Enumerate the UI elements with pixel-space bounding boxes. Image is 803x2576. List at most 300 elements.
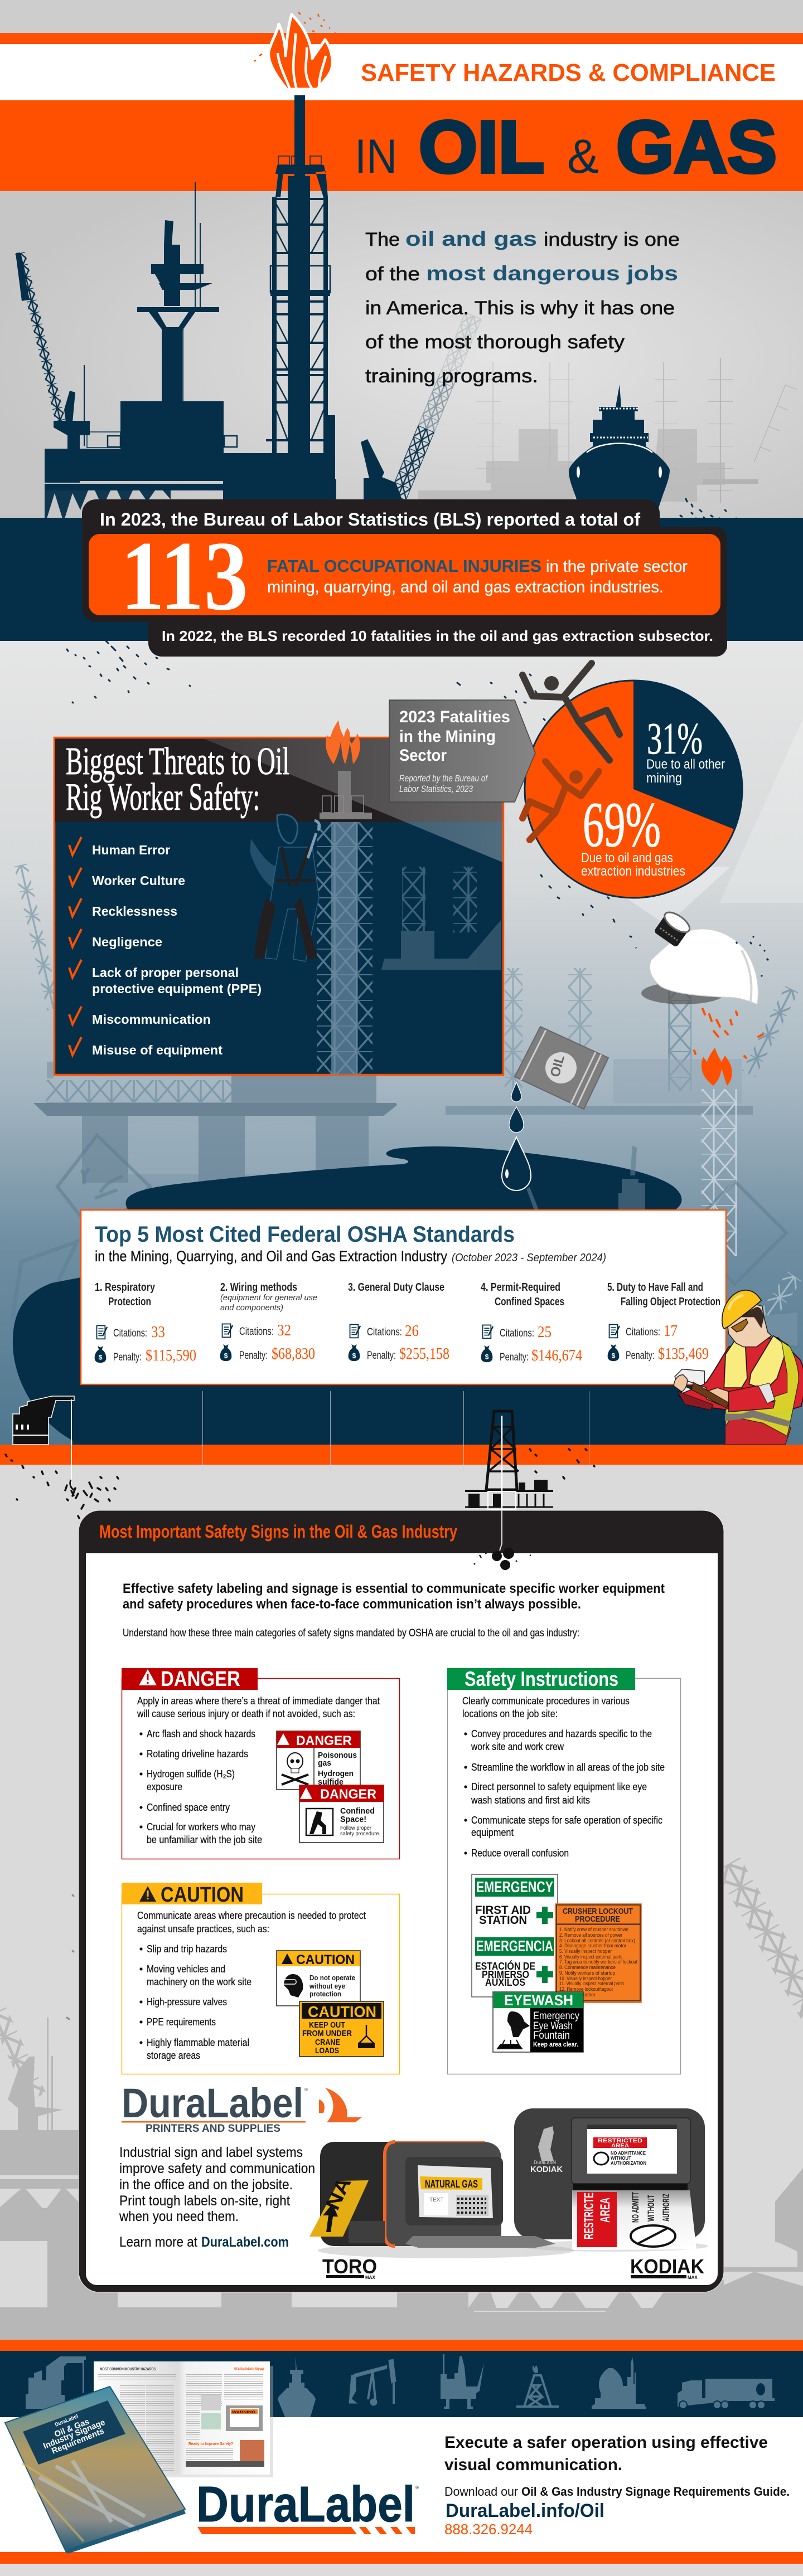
sign: eyewash: Eye Wash [533, 2020, 573, 2032]
text: printer pitch: Industrial sign and label systems [119, 2145, 303, 2160]
sign: caution crane loads [299, 2001, 384, 2057]
sign: crusher lockout procedure: 11. Visually inspect external parts [559, 1981, 624, 1986]
sign: caution crane loads: KEEP OUT [309, 2020, 345, 2030]
checklist: Lack of proper personal [92, 965, 239, 980]
title: OIL [419, 106, 544, 188]
caution bullets: machinery on the work site [147, 1976, 251, 1987]
column 4: $146,674 [531, 1347, 582, 1364]
column 3: Citations: [367, 1326, 402, 1338]
logo: DuraLabel printers and supplies: DuraLabel [122, 2080, 303, 2126]
splatter: navy ink [67, 499, 737, 937]
column 2: Penalty: [239, 1350, 268, 1362]
sign: danger confined space: safety procedure. [340, 1831, 380, 1837]
sign: danger confined space: Follow proper [340, 1825, 372, 1831]
illustration: Kodiak printer: RESTRICTED [598, 2138, 642, 2144]
black stat box: In 2023, the Bureau of Labor Statistics (BLS) reported a total of [100, 509, 640, 529]
danger bullets: Hydrogen sulfide (H₂S) [147, 1768, 235, 1780]
panel: safety instructions: Clearly communicate procedures in various [462, 1695, 630, 1707]
column 5: 5. Duty to Have Fall and [607, 1281, 703, 1294]
black stat box: in the private sector [546, 557, 688, 576]
logo: KODIAK MAX: MAX [688, 2275, 698, 2280]
icon: refinery [592, 2357, 646, 2409]
danger bullets: exposure [147, 1781, 182, 1792]
right white tower [702, 1089, 737, 1256]
sign: emergency first aid: EMERGENCIA [476, 1937, 553, 1955]
illustration: Toro printer: NATURAL GAS [425, 2179, 478, 2190]
panel: safety instructions: Safety Instructions [465, 1668, 618, 1690]
icon: falling worker dark [523, 663, 620, 760]
misty background rigs [418, 358, 796, 503]
text: printer pitch [119, 2145, 315, 2250]
sign: caution crane loads: CRANE [315, 2038, 340, 2047]
column 2: $68,830 [272, 1345, 315, 1363]
column 1: Penalty: [113, 1352, 142, 1363]
big number: 113 [120, 521, 248, 631]
sign: crusher lockout procedure: 5. Visually inspect hopper [559, 1948, 612, 1954]
icon: flame [254, 12, 336, 89]
light beam from headlamp [580, 867, 731, 925]
column 2: 2. Wiring methods [220, 1281, 297, 1294]
black stat box: FATAL OCCUPATIONAL INJURIES [267, 556, 541, 576]
sign: danger poisonous gas [277, 1731, 360, 1790]
background rig left, grey [0, 2007, 79, 2340]
ship silhouette [569, 385, 670, 510]
pie chart: 2023 fatalities: mining [646, 771, 682, 786]
danger bullets: be unfamiliar with the job site [147, 1834, 262, 1845]
sign: emergency first aid: FIRST AID [475, 1904, 531, 1917]
illustration: Kodiak printer: RESTRICTE [582, 2193, 597, 2239]
text: printer pitch: Print tough labels on-site, right [119, 2193, 290, 2209]
illustration: Kodiak printer: AUTHORIZATION [611, 2161, 646, 2166]
sign: eyewash: Fountain [533, 2030, 570, 2042]
black stat box [82, 499, 727, 657]
splatter: grey ink [67, 1861, 665, 2092]
footer icon band [0, 2351, 803, 2418]
background crane right of standards [742, 1271, 801, 1346]
callout: 2023 fatalities in the mining sector: in the Mining [399, 727, 496, 746]
checklist: Recklessness [92, 904, 177, 918]
bottom orange stripe [0, 2552, 803, 2564]
background rig right, grey [715, 1857, 803, 2340]
header band: orange [0, 100, 803, 191]
callout: 2023 fatalities in the mining sector: 2023 Fatalities [399, 708, 510, 726]
column 1: Protection [108, 1296, 151, 1308]
panel header [55, 739, 502, 822]
instruction bullets: Direct personnel to safety equipment like eye [471, 1781, 647, 1792]
call to action: Oil & Gas Industry Signage Requirements Guide. [521, 2485, 790, 2499]
column 5: 17 [664, 1323, 678, 1340]
column 1: 1. Respiratory [95, 1281, 156, 1294]
intro text block: in America. This is why it has one [365, 298, 675, 319]
callout: 2023 fatalities in the mining sector [389, 700, 535, 802]
header band: thin orange stripe [0, 33, 803, 44]
tower in panel [317, 771, 373, 1075]
title [355, 59, 777, 188]
sign: emergency first aid: AUXILOS [485, 1977, 525, 1988]
sign: danger poisonous gas: Hydrogen [318, 1769, 354, 1778]
open pages: Oil & Gas Industry Signage [234, 2368, 264, 2371]
icon: pumpjack [349, 2359, 396, 2405]
caution bullets: Slip and trip hazards [147, 1943, 227, 1955]
sign: crusher lockout procedure: 2. Remove all sources of power [559, 1932, 622, 1938]
danger bullets: Arc flash and shock hazards [147, 1728, 255, 1739]
sign: eyewash: Keep area clear. [533, 2040, 578, 2048]
sign: caution crane loads: CAUTION [308, 2003, 376, 2020]
intro text block: most dangerous jobs [426, 262, 678, 285]
oil pool [13, 1146, 725, 1445]
panel: OSHA standards: in the Mining, Quarrying, and Oil and Gas Extraction Industry [95, 1248, 447, 1265]
illustration: Kodiak printer: KODIAK [530, 2165, 563, 2174]
column 3: $255,158 [399, 1345, 449, 1363]
sign: crusher lockout procedure: PROCEDURE [575, 1914, 620, 1924]
callout: 2023 fatalities in the mining sector: Sector [399, 746, 447, 765]
sign: danger poisonous gas: sulfide [318, 1777, 344, 1787]
column 4: 4. Permit-Required [481, 1281, 560, 1294]
sign: caution eye protection [277, 1951, 360, 2006]
title: SAFETY HAZARDS & COMPLIANCE [361, 59, 776, 86]
sign: caution eye protection: without eye [309, 1982, 345, 1990]
caution bullets: Moving vehicles and [147, 1963, 225, 1975]
column 5: $135,469 [658, 1345, 709, 1363]
sign: emergency first aid: STATION [479, 1914, 527, 1927]
text: printer pitch: Learn more at [119, 2234, 197, 2250]
checklist [69, 837, 262, 1057]
main rig silhouette [45, 182, 336, 518]
panel: OSHA standards [81, 1210, 726, 1384]
danger bullets [139, 1728, 262, 1845]
panel: OSHA standards: (October 2023 - September 2024) [452, 1252, 606, 1264]
sign: crusher lockout procedure: CRUSHER LOCKOUT [563, 1907, 633, 1916]
intro text block [365, 227, 680, 387]
callout: 2023 fatalities in the mining sector: Labor Statistics, 2023 [399, 784, 473, 794]
column 5: Penalty: [626, 1350, 655, 1362]
icon: hard hat with headlamp [636, 908, 768, 1004]
navy band [0, 518, 803, 641]
light windows below signs panel [118, 2292, 664, 2312]
column 1: $115,590 [146, 1347, 196, 1364]
column 2: (equipment for general use [220, 1293, 317, 1302]
icon: ship [278, 2356, 316, 2418]
column 4: Penalty: [500, 1352, 529, 1363]
panel: OSHA standards: Top 5 Most Cited Federal OSHA Standards [95, 1222, 515, 1247]
panel: safety instructions: locations on the job site: [462, 1708, 558, 1719]
pie chart: 2023 fatalities: Due to oil and gas [581, 850, 673, 866]
sign: crusher lockout procedure: 6. Visually inspect external parts [559, 1954, 622, 1960]
column 4: Citations: [500, 1328, 534, 1339]
illustration: Kodiak printer: DuraLabel [534, 2160, 556, 2165]
icon: oil drops [502, 1082, 531, 1190]
intro paragraph: and safety procedures when face-to-face communication isn’t always possible. [123, 1597, 581, 1612]
panel: caution: Communicate areas where precaution is needed to protect [137, 1910, 366, 1921]
illustration: Kodiak printer [514, 2108, 708, 2252]
call to action: 888.326.9244 [444, 2521, 533, 2538]
left crane silhouette [15, 252, 120, 449]
intro text block: of the most thorough safety [365, 332, 625, 353]
checklist: Misuse of equipment [92, 1043, 222, 1057]
light diagonal streak [719, 719, 803, 903]
illustration: Kodiak printer: NO ADMITTANCE [611, 2151, 646, 2156]
logo: DuraLabel printers and supplies: ® [304, 2087, 308, 2092]
icon: falling worker on pie [523, 761, 599, 840]
call to action: Execute a safer operation using effective [444, 2433, 768, 2452]
text: printer pitch: in the office and on the jobsite. [119, 2177, 293, 2193]
intro paragraph: Effective safety labeling and signage is essential to communicate specific worker equipment [123, 1581, 665, 1596]
illustration: worker reading clipboard [674, 1290, 803, 1445]
sign: eyewash: Emergency [533, 2010, 579, 2022]
brochure cover: DuraLabel [54, 2413, 79, 2428]
black stat box: mining, quarrying, and oil and gas extraction industries. [267, 578, 664, 596]
panel title [66, 740, 289, 819]
brochure cover [5, 2387, 186, 2554]
sign: emergency first aid: ESTACIÓN DE [475, 1960, 535, 1972]
background rigs, right [446, 968, 799, 1115]
logo: KODIAK MAX: KODIAK [630, 2255, 704, 2278]
logo: TORO MAX: MAX [365, 2275, 375, 2280]
sign: danger poisonous gas: Poisonous [318, 1751, 357, 1760]
caution bullets: PPE requirements [147, 2016, 216, 2028]
icon: flame on tower [326, 720, 360, 764]
intro paragraph: Understand how these three main categories of safety signs mandated by OSHA are crucial to the oil and gas industry: [123, 1627, 579, 1639]
sign: crusher lockout procedure: 4. Disengage crusher from motor [559, 1943, 626, 1948]
section background: safety signs [0, 1465, 803, 2340]
illustration: Toro printer [309, 2142, 574, 2258]
panel heading: Most Important Safety Signs in the Oil & Gas Industry [99, 1522, 457, 1542]
column 5 [607, 1281, 720, 1363]
icon: oil derrick [465, 1411, 553, 1538]
illustration: Kodiak printer: WITHOUT [646, 2195, 656, 2222]
pie chart: 2023 fatalities: extraction industries [581, 864, 685, 879]
top grey background strip [0, 0, 803, 33]
panel: danger: DANGER [161, 1668, 240, 1691]
intro text block: oil and gas [405, 227, 537, 250]
column 3 [348, 1281, 449, 1363]
checklist: Miscommunication [92, 1012, 211, 1027]
icon: oil barrel: OIL [548, 1053, 568, 1079]
open pages: WARNING [232, 2411, 255, 2414]
intro text block: industry is one [544, 229, 680, 250]
caution bullets: storage areas [147, 2050, 200, 2061]
bottom grey strip [0, 2564, 803, 2576]
sign: caution crane loads: FROM UNDER [302, 2029, 352, 2038]
background band below signs [79, 2279, 724, 2340]
call to action: Download our [444, 2485, 518, 2499]
instruction bullets: wash stations and first aid kits [471, 1795, 590, 1806]
column 2: 32 [277, 1322, 291, 1339]
second crane with fading boom [361, 312, 482, 502]
title: GAS [616, 106, 777, 188]
lower dark band under standards [72, 1384, 725, 1445]
call to action [444, 2433, 790, 2538]
sign: crusher lockout procedure: 9. Notify workers of startup [559, 1970, 615, 1976]
caution bullets [139, 1943, 251, 2061]
background crane, left of threats panel [14, 863, 60, 1078]
column 2 [220, 1281, 317, 1363]
section background: skyline [0, 189, 803, 524]
sign: caution eye protection: Do not operate [309, 1974, 355, 1982]
column 3: 26 [405, 1323, 419, 1340]
callout: 2023 fatalities in the mining sector: Reported by the Bureau of [399, 773, 488, 784]
logo: DuraLabel printers and supplies: PRINTERS AND SUPPLIES [146, 2123, 280, 2135]
logo: TORO MAX: TORO [322, 2255, 377, 2278]
column 2: and components) [220, 1303, 283, 1313]
sign: eyewash: EYEWASH [504, 1992, 573, 2009]
panel: safety signs [0, 1510, 803, 2576]
checklist: Negligence [92, 935, 162, 949]
intro paragraph [123, 1581, 665, 1639]
hazard diamonds, background [13, 1135, 786, 1318]
intro text block: The [365, 229, 400, 250]
checklist: protective equipment (PPE) [92, 981, 262, 996]
thin guide lines [203, 1391, 589, 1471]
sign: caution eye protection: CAUTION [296, 1952, 355, 1967]
illustration: brochure [5, 2361, 273, 2554]
pie chart: 2023 fatalities: 31% [647, 715, 703, 764]
intro text block: training programs. [365, 366, 538, 387]
column 1: 33 [151, 1324, 165, 1341]
icon: crane small [13, 1396, 74, 1490]
icon: crane [26, 2356, 86, 2409]
danger bullets: Rotating driveline hazards [147, 1748, 248, 1760]
sign: crusher lockout procedure: 12. Remove lockout/tagout [559, 1986, 613, 1992]
caution bullets: Highly flammable material [147, 2037, 249, 2048]
sign: eyewash [493, 1992, 583, 2052]
icon: derrick [516, 2375, 559, 2407]
sign: crusher lockout procedure: 8. Commence maintenance [559, 1965, 616, 1970]
orange stripe [0, 1445, 803, 1465]
column 3: 3. General Duty Clause [348, 1281, 444, 1294]
sign: crusher lockout procedure: 3. Lockout all controls (at control box) [559, 1938, 635, 1943]
instruction bullets: Convey procedures and hazards specific to the [471, 1728, 652, 1739]
panel: caution [122, 1883, 399, 2074]
panel: danger: Apply in areas where there’s a threat of immediate danger that [137, 1695, 380, 1707]
text: printer pitch: DuraLabel.com [201, 2234, 289, 2250]
icon: small flame and embers [694, 1009, 763, 1086]
footer white panel [0, 2417, 803, 2552]
checklist: Worker Culture [92, 873, 185, 888]
column 4 [481, 1281, 582, 1364]
small rig in panel [381, 867, 501, 970]
illustration: Kodiak printer: NO ADMITT [630, 2192, 641, 2223]
icon: offshore rig [441, 2354, 484, 2409]
panel: danger [122, 1668, 399, 1859]
instruction bullets: work site and work crew [471, 1741, 564, 1752]
orange stat panel [89, 534, 720, 615]
pie chart: 2023 fatalities: 69% [583, 789, 661, 860]
title: IN [355, 130, 397, 183]
brochure cover: Oil & Gas [53, 2417, 91, 2439]
black stat box: In 2022, the BLS recorded 10 fatalities in the oil and gas extraction subsector. [162, 628, 713, 644]
column 2: Citations: [239, 1326, 274, 1338]
sign: crusher lockout procedure: 10. Visually inspect hopper [559, 1976, 612, 1981]
instruction bullets: Streamline the workflow in all areas of the job site [471, 1762, 665, 1773]
illustration: Kodiak printer: AREA [611, 2143, 629, 2149]
sign: caution eye protection: protection [309, 1990, 341, 1998]
printed label [572, 2190, 696, 2250]
pie chart: 2023 fatalities: Due to all other [646, 757, 725, 772]
printed tape [309, 2180, 369, 2237]
open pages [94, 2361, 270, 2475]
column 3: Penalty: [367, 1350, 396, 1362]
sign: caution crane loads: LOADS [315, 2046, 339, 2055]
column 1 [95, 1281, 196, 1364]
open pages: MOST COMMON INDUSTRY HAZARDS [100, 2368, 156, 2371]
worker with harness [250, 814, 320, 961]
panel: danger: will cause serious injury or death if not avoided, such as: [137, 1708, 355, 1719]
icon: tanker truck [678, 2379, 775, 2409]
checklist: Human Error [92, 843, 170, 857]
panel: caution: against unsafe practices, such as: [137, 1923, 269, 1935]
panel title: Rig Worker Safety: [66, 776, 260, 819]
brochure cover: Requirements [50, 2426, 105, 2456]
logo: DuraLabel footer: ® [415, 2485, 419, 2490]
sign: crusher lockout procedure: 1. Notify crew of crusher shutdown [559, 1927, 628, 1932]
section background: threats and standards [0, 641, 803, 1445]
icon: flame on derrick [533, 2365, 538, 2373]
sign: crusher lockout procedure: 13. Start crusher [559, 1992, 596, 1997]
danger bullets: Crucial for workers who may [147, 1821, 255, 1833]
illustration: Kodiak printer: AUTHORIZ [661, 2194, 671, 2222]
instruction bullets [464, 1728, 665, 1859]
sign: danger confined space: Space! [340, 1815, 366, 1824]
panel: safety instructions [447, 1668, 680, 2074]
sign: danger confined space: Confined [340, 1806, 375, 1816]
logo: DuraLabel footer: DuraLabel [196, 2477, 415, 2533]
column 1: Citations: [113, 1328, 147, 1339]
instruction bullets: Communicate steps for safe operation of specific [471, 1815, 662, 1826]
sign: emergency first aid [472, 1874, 558, 1997]
illustration: Toro printer: NA [321, 2174, 356, 2213]
text: printer pitch: improve safety and communication [119, 2161, 315, 2176]
illustration: Toro printer: TEXT [429, 2197, 444, 2203]
call to action: DuraLabel.info/Oil [446, 2500, 604, 2521]
illustration: Kodiak printer: AREA [598, 2198, 613, 2223]
icon: oil barrel [515, 1027, 608, 1109]
orange stripe above footer [0, 2340, 803, 2351]
column 4: 25 [538, 1324, 552, 1341]
sign: emergency first aid: PRIMERSO [482, 1969, 529, 1980]
open pages: Ready to Improve Safety? [188, 2442, 233, 2446]
instruction bullets: Reduce overall confusion [471, 1848, 569, 1859]
sign: danger confined space: DANGER [320, 1787, 376, 1802]
danger bullets: Confined space entry [147, 1802, 230, 1813]
sign: danger poisonous gas: DANGER [296, 1733, 352, 1748]
instruction bullets: equipment [471, 1827, 514, 1838]
header band: white [0, 44, 803, 100]
background offshore platform, section two [33, 1076, 397, 1188]
text: printer pitch: when you need them. [119, 2209, 239, 2224]
pie chart: 2023 fatalities [525, 681, 742, 898]
panel title: Biggest Threats to Oil [66, 740, 289, 783]
column 5: Falling Object Protection [621, 1296, 720, 1308]
splatter: black ink [6, 1449, 594, 1518]
panel: biggest threats [55, 720, 503, 1075]
title: & [567, 130, 599, 183]
illustration: Kodiak printer: WITHOUT [611, 2156, 631, 2161]
caution bullets: High-pressure valves [147, 1996, 227, 2008]
intro text block: of the [365, 264, 420, 285]
sign: danger confined space [299, 1785, 384, 1843]
call to action: visual communication. [444, 2456, 622, 2474]
flare tower [266, 95, 335, 482]
icon: gears [474, 1548, 531, 1570]
sign: crusher lockout procedure: 7. Tag area to notify workers of lockout [559, 1959, 637, 1965]
sign: danger poisonous gas: gas [318, 1758, 331, 1768]
column 5: Citations: [626, 1326, 660, 1338]
brochure cover: Industry Signage [42, 2418, 107, 2451]
small rig in pool [526, 1146, 645, 1210]
sign: emergency first aid: EMERGENCY [476, 1878, 553, 1895]
column 4: Confined Spaces [495, 1296, 564, 1308]
